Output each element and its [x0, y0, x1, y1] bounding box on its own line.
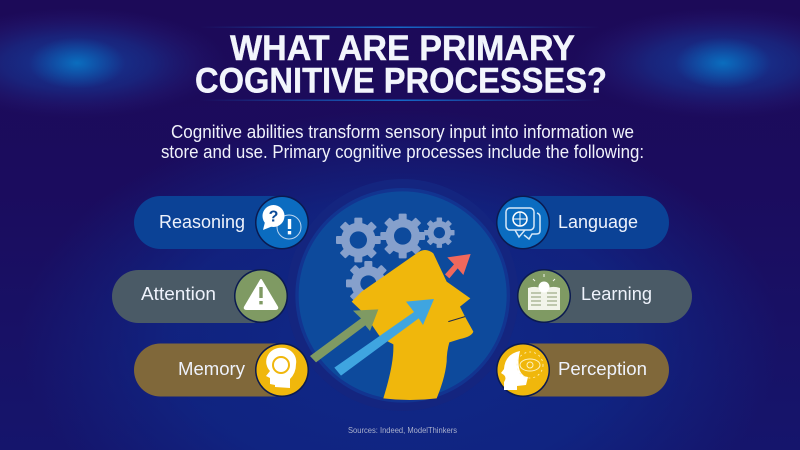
- pill: Reasoning: Reasoning: [159, 211, 245, 232]
- head: [352, 250, 473, 400]
- pill: Memory: [134, 343, 309, 397]
- title: WHAT ARE PRIMARY: [230, 29, 575, 68]
- pill: Language: Language: [558, 211, 638, 232]
- pill: Language: [496, 196, 669, 250]
- icon: head with eye: [496, 343, 550, 397]
- icon: head with circular arrow: [255, 343, 309, 397]
- pill: Perception: Perception: [558, 358, 647, 379]
- title: COGNITIVE PROCESSES?: [195, 62, 607, 100]
- central illustration: [286, 179, 518, 411]
- pill: Attention: Attention: [141, 283, 216, 304]
- icon: warning triangle: [234, 269, 288, 323]
- intro text: store and use. Primary cognitive processes include the following:: [161, 141, 644, 162]
- pill: Learning: Learning: [581, 283, 652, 304]
- intro text: [161, 121, 644, 162]
- central circle: [286, 179, 518, 411]
- pill: Reasoning: [134, 196, 309, 250]
- source note: Sources: Indeed, ModelThinkers: [348, 426, 457, 435]
- arrow: red: [445, 254, 471, 278]
- icon: question and exclamation bubbles: ?: [269, 208, 278, 226]
- icon: globe speech bubbles: [496, 196, 550, 250]
- head and gears: [295, 188, 510, 403]
- pill: Learning: [517, 269, 692, 323]
- arrow: green: [310, 309, 378, 362]
- icon: question and exclamation bubbles: [255, 196, 309, 250]
- pill: Attention: [112, 269, 288, 323]
- icon: open book and light bulb: [517, 269, 571, 323]
- pill: Memory: Memory: [178, 358, 246, 379]
- pill: Perception: [496, 343, 669, 397]
- intro text: Cognitive abilities transform sensory input into information we: [171, 121, 634, 142]
- mouth line: [448, 317, 465, 322]
- title: [195, 29, 607, 100]
- arrow: blue: [334, 299, 434, 376]
